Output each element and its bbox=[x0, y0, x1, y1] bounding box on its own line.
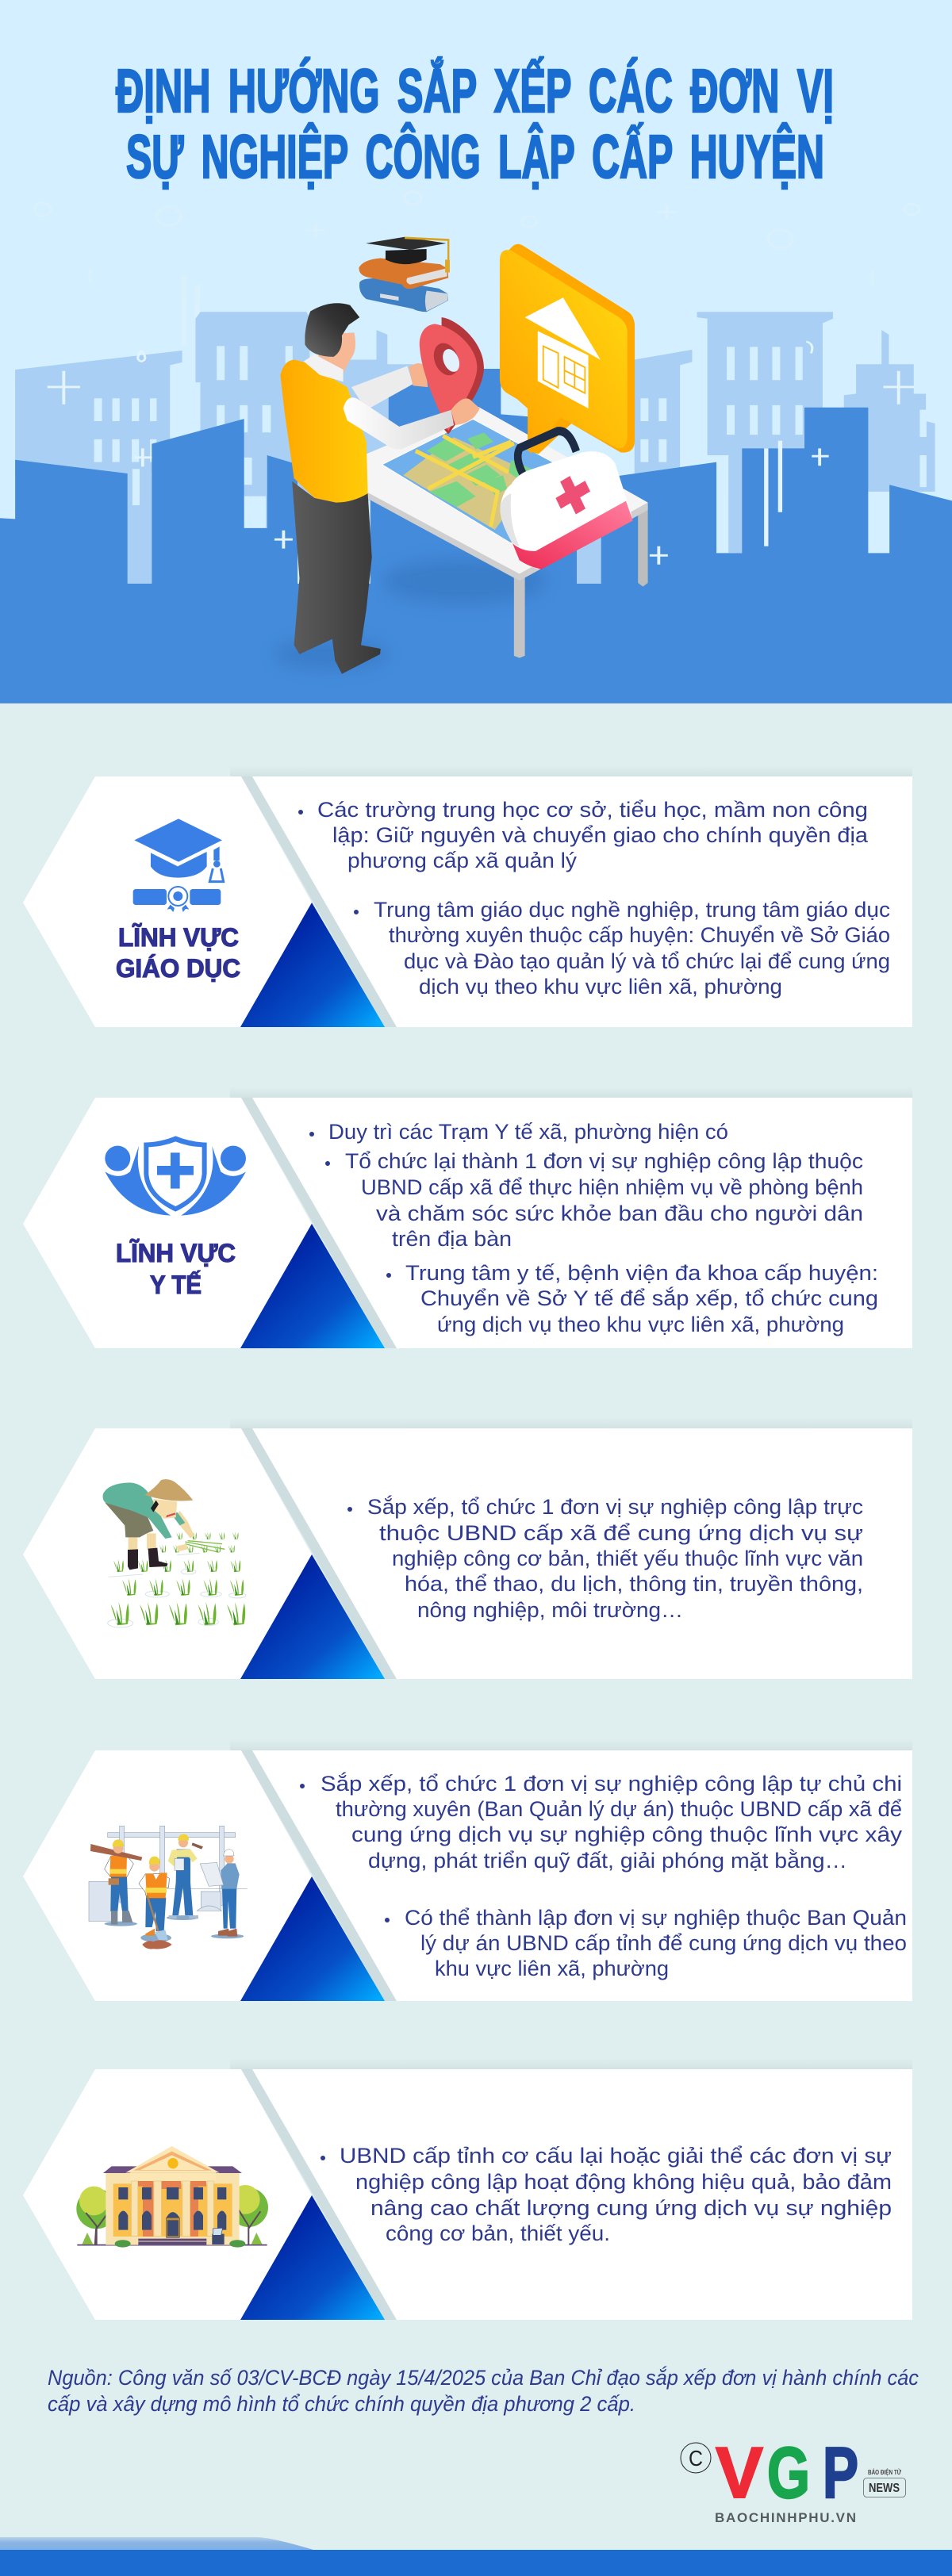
foreman with blueprint bbox=[200, 1850, 240, 1937]
text block: lập: Giữ nguyên và chuyển giao cho chính quyền địa bbox=[332, 823, 869, 847]
text block bbox=[347, 1494, 863, 1622]
man: head bbox=[304, 303, 359, 381]
text block: Các trường trung học cơ sở, tiểu học, mầm non công bbox=[317, 798, 868, 822]
panel: health bbox=[23, 1087, 912, 1348]
man: near arm and hand bbox=[344, 397, 480, 450]
icon: books and graduation cap bbox=[359, 237, 450, 312]
title bbox=[116, 56, 834, 191]
page background bbox=[0, 703, 952, 2576]
map bbox=[382, 419, 566, 543]
text block bbox=[309, 1120, 878, 1336]
hero background bbox=[0, 0, 952, 703]
text block: ứng dịch vụ theo khu vực liên xã, phường bbox=[437, 1313, 844, 1336]
text block: lý dự án UBND cấp tỉnh để cung ứng dịch vụ theo bbox=[420, 1931, 907, 1955]
source note: cấp và xây dựng mô hình tổ chức chính quyền địa phương 2 cấp. bbox=[48, 2392, 635, 2416]
icon: house bbox=[525, 297, 601, 408]
icon: location pin bbox=[420, 317, 484, 434]
text block: Trung tâm y tế, bệnh viện đa khoa cấp huyện: bbox=[405, 1261, 878, 1285]
text block: dựng, phát triển quỹ đất, giải phóng mặt bằng… bbox=[368, 1848, 847, 1873]
source note: Nguồn: Công văn số 03/CV-BCĐ ngày 15/4/2025 của Ban Chỉ đạo sắp xếp đơn vị hành chính các bbox=[48, 2365, 919, 2390]
heading: LĨNH VỰC bbox=[118, 923, 239, 952]
text block: nghiệp công cơ bản, thiết yếu thuộc lĩnh vực văn bbox=[392, 1547, 863, 1570]
text block: Sắp xếp, tổ chức 1 đơn vị sự nghiệp công lập trực bbox=[367, 1494, 863, 1519]
text block: trên địa bàn bbox=[392, 1227, 512, 1251]
text block: nghiệp công lập hoạt động không hiệu quả, bảo đảm bbox=[355, 2170, 892, 2194]
worker with shovel bbox=[139, 1857, 172, 1949]
panel: education bbox=[23, 765, 912, 1027]
text block: nông nghiệp, môi trường… bbox=[417, 1598, 683, 1622]
heading bbox=[116, 923, 240, 983]
heading: GIÁO DỤC bbox=[116, 954, 240, 983]
panel: provincial restructuring bbox=[23, 2058, 912, 2320]
icon: graduation cap and diploma bbox=[133, 818, 224, 912]
man: far arm bbox=[351, 363, 428, 410]
icon: public building with trees bbox=[76, 2146, 268, 2248]
text block: Có thể thành lập đơn vị sự nghiệp thuộc Ban Quản bbox=[405, 1906, 907, 1930]
text block: Tổ chức lại thành 1 đơn vị sự nghiệp công lập thuộc bbox=[345, 1149, 863, 1173]
text block: khu vực liên xã, phường bbox=[435, 1957, 669, 1980]
VGP logo: G bbox=[767, 2433, 810, 2513]
medical kit bbox=[500, 431, 633, 569]
cityscape background bbox=[0, 192, 952, 703]
VGP logo: BÁO ĐIỆN TỬ bbox=[868, 2469, 901, 2476]
heading: Y TẾ bbox=[150, 1271, 202, 1299]
icon: construction workers bbox=[89, 1826, 248, 1949]
VGP logo: P bbox=[823, 2433, 858, 2513]
worker with beam bbox=[90, 1839, 142, 1925]
text block: nâng cao chất lượng cung ứng dịch vụ sự nghiệp bbox=[370, 2196, 892, 2220]
man: vest bbox=[280, 360, 368, 503]
text block: hóa, thể thao, du lịch, thông tin, truyền thông, bbox=[405, 1572, 863, 1596]
front buildings bbox=[0, 369, 952, 703]
sparkle crosses bbox=[48, 341, 915, 565]
panel: construction and land bbox=[23, 1739, 912, 2001]
text block: phương cấp xã quản lý bbox=[347, 849, 578, 872]
footer bar bbox=[0, 2537, 952, 2576]
VGP logo: C bbox=[689, 2446, 703, 2471]
text block: cung ứng dịch vụ sự nghiệp công thuộc lĩnh vực xây bbox=[351, 1823, 903, 1846]
man: trousers bbox=[292, 481, 381, 674]
text block: Duy trì các Trạm Y tế xã, phường hiện có bbox=[328, 1120, 728, 1144]
panel: culture and agriculture bbox=[23, 1417, 912, 1679]
heading: LĨNH VỰC bbox=[116, 1239, 236, 1267]
hero illustration: man planning on map bbox=[274, 237, 648, 674]
text block: UBND cấp tỉnh cơ cấu lại hoặc giải thể các đơn vị sự bbox=[340, 2144, 892, 2168]
speech bubble bbox=[500, 244, 635, 454]
back buildings bbox=[15, 312, 935, 584]
text block: Chuyển về Sở Y tế để sắp xếp, tổ chức cung bbox=[420, 1286, 878, 1310]
text block: thường xuyên thuộc cấp huyện: Chuyển về Sở Giáo bbox=[389, 923, 890, 947]
VGP logo: BAOCHINHPHU.VN bbox=[715, 2510, 856, 2525]
text block: dịch vụ theo khu vực liên xã, phường bbox=[419, 975, 782, 999]
VGP logo: NEWS bbox=[869, 2482, 900, 2495]
text block: thuộc UBND cấp xã để cung ứng dịch vụ sự bbox=[379, 1521, 863, 1545]
text block: thường xuyên (Ban Quản lý dự án) thuộc UBND cấp xã để bbox=[336, 1797, 902, 1821]
text block: và chăm sóc sức khỏe ban đầu cho người dân bbox=[376, 1202, 863, 1225]
text block bbox=[298, 798, 890, 999]
text block bbox=[321, 2144, 892, 2245]
text block: Sắp xếp, tổ chức 1 đơn vị sự nghiệp công lập tự chủ chi bbox=[321, 1771, 902, 1796]
windows bbox=[94, 346, 927, 528]
heading bbox=[116, 1239, 236, 1299]
text block: UBND cấp xã để thực hiện nhiệm vụ về phòng bệnh bbox=[361, 1175, 863, 1199]
text block: Trung tâm giáo dục nghề nghiệp, trung tâm giáo dục bbox=[374, 898, 890, 922]
text block bbox=[300, 1771, 907, 1980]
source note bbox=[48, 2365, 919, 2416]
icon: medical shield and people bbox=[105, 1136, 246, 1216]
text block: công cơ bản, thiết yếu. bbox=[386, 2221, 610, 2245]
text block: dục và Đào tạo quản lý và tổ chức lại để cung ứng bbox=[404, 949, 890, 973]
icon: farmer planting rice bbox=[103, 1479, 246, 1627]
trees bbox=[76, 2185, 268, 2244]
VGP logo: V bbox=[716, 2433, 763, 2513]
worker with overalls bbox=[168, 1834, 203, 1919]
table bbox=[367, 407, 648, 658]
VGP logo bbox=[681, 2433, 906, 2525]
ground shadows bbox=[274, 558, 547, 669]
